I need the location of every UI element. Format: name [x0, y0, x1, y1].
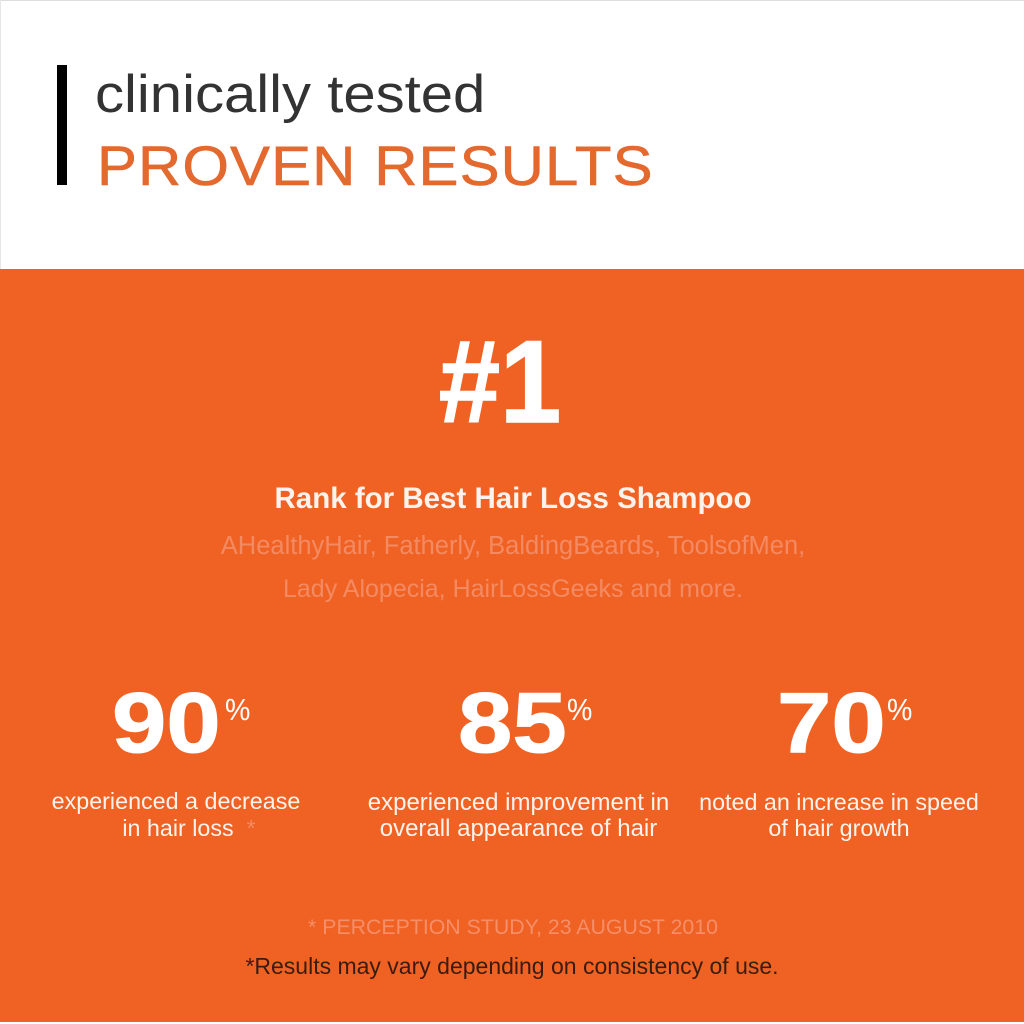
stat: 85 percent [368, 676, 669, 842]
stat: 70 percent [699, 676, 979, 841]
sources text: AHealthyHair, Fatherly, BaldingBeards, ToolsofMen, [221, 532, 805, 560]
stat: 90 percent [52, 676, 300, 840]
rank number: #1 [439, 316, 561, 447]
caption 90: in hair loss * [122, 814, 256, 840]
value 70: % [887, 692, 912, 727]
rank heading: Rank for Best Hair Loss Shampoo [274, 482, 752, 515]
study footnote: * PERCEPTION STUDY, 23 AUGUST 2010 [308, 915, 718, 939]
value 70: 70 [777, 676, 886, 771]
value 85: % [567, 692, 592, 727]
caption 70: of hair growth [768, 815, 910, 841]
sources text: Lady Alopecia, HairLossGeeks and more. [283, 575, 743, 603]
value 85: 85 [458, 676, 567, 771]
caption 90: experienced a decrease [52, 788, 300, 814]
caption 90 [52, 788, 300, 840]
caption 85: experienced improvement in [368, 789, 669, 816]
caption 85: overall appearance of hair [380, 815, 657, 842]
heading: proven results: PROVEN RESULTS [97, 134, 654, 196]
value 90: 90 [112, 676, 221, 771]
sources text [220, 532, 805, 603]
caption 70: noted an increase in speed [699, 789, 979, 815]
panel: orange results [0, 269, 1024, 1022]
image edge line left [0, 0, 1, 269]
caption 85 [368, 789, 669, 842]
value 90: % [225, 692, 250, 727]
title: clinically tested: clinically tested [95, 65, 485, 124]
disclaimer: *Results may vary depending on consistency of use. [245, 952, 779, 978]
caption 70 [699, 789, 979, 841]
image edge line top [0, 0, 1024, 1]
accent bar [57, 65, 67, 185]
